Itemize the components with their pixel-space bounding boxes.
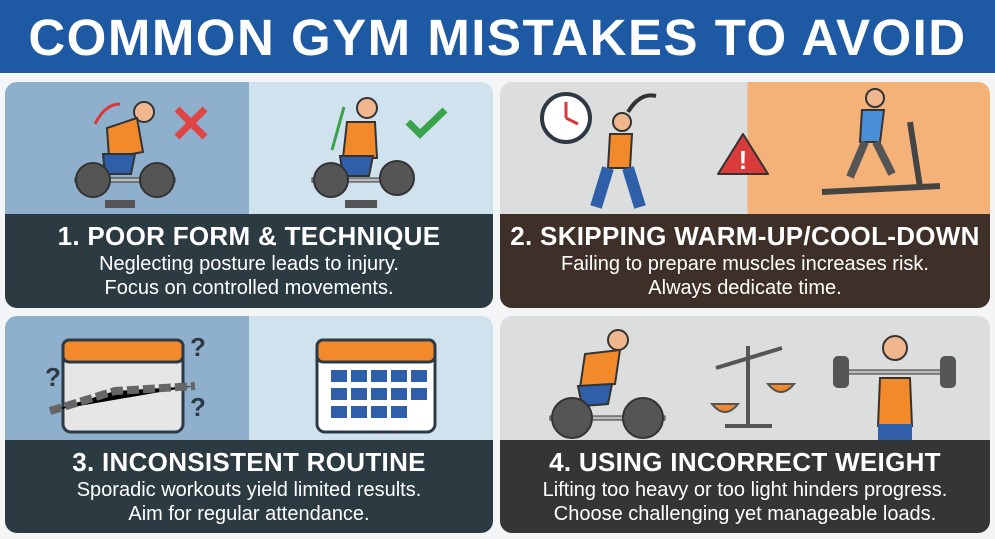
icon: red X [177,109,205,137]
illustration: weights and scale [500,316,990,440]
icon: broken calendar [45,332,206,432]
caption: poor form: Focus on controlled movements. [104,277,394,299]
caption: poor form: Neglecting posture leads to injury. [99,253,399,275]
panel: inconsistent routine [5,316,493,533]
icon: broken calendar: ? [190,332,206,362]
icon: complete calendar [317,340,435,432]
icon: clock [542,94,590,142]
caption: inconsistent routine: 3. INCONSISTENT ROUTINE [72,447,426,477]
icon: woman curling [833,336,956,440]
caption: inconsistent routine: Aim for regular attendance. [128,503,370,525]
illustration: deadlift comparison [5,82,493,214]
icon: warning: ! [739,145,747,175]
illustration: stretching and treadmill [500,82,990,214]
icon: treadmill runner [822,89,940,192]
caption: warm-up [500,214,990,308]
icon: warning [718,134,768,175]
panel: poor form [5,82,493,308]
icon: stretching woman [596,95,656,207]
icon: good lifter [312,98,414,208]
icon: broken calendar: ? [45,362,61,392]
caption: warm-up: Failing to prepare muscles increases risk. [561,253,929,275]
caption: inconsistent routine [5,440,493,533]
icon: bad lifter [75,102,175,208]
caption: warm-up: 2. SKIPPING WARM-UP/COOL-DOWN [510,221,980,251]
title: COMMON GYM MISTAKES TO AVOID [28,9,967,66]
caption: incorrect weight: Lifting too heavy or too light hinders progress. [543,479,947,501]
caption: incorrect weight [500,440,990,533]
caption: inconsistent routine: Sporadic workouts yield limited results. [77,479,421,501]
icon: man lifting heavy [550,330,665,438]
icon: broken calendar: ? [190,392,206,422]
caption: incorrect weight: Choose challenging yet manageable loads. [554,503,936,525]
icon: green check [408,110,445,134]
caption: poor form: 1. POOR FORM & TECHNIQUE [58,221,440,251]
caption: poor form [5,214,493,308]
illustration: calendars [5,316,493,440]
panel: warm-up [500,82,990,308]
caption: incorrect weight: 4. USING INCORRECT WEIGHT [549,447,941,477]
caption: warm-up: Always dedicate time. [648,277,842,299]
icon: balance scale [712,346,794,426]
panel: incorrect weight [500,316,990,533]
